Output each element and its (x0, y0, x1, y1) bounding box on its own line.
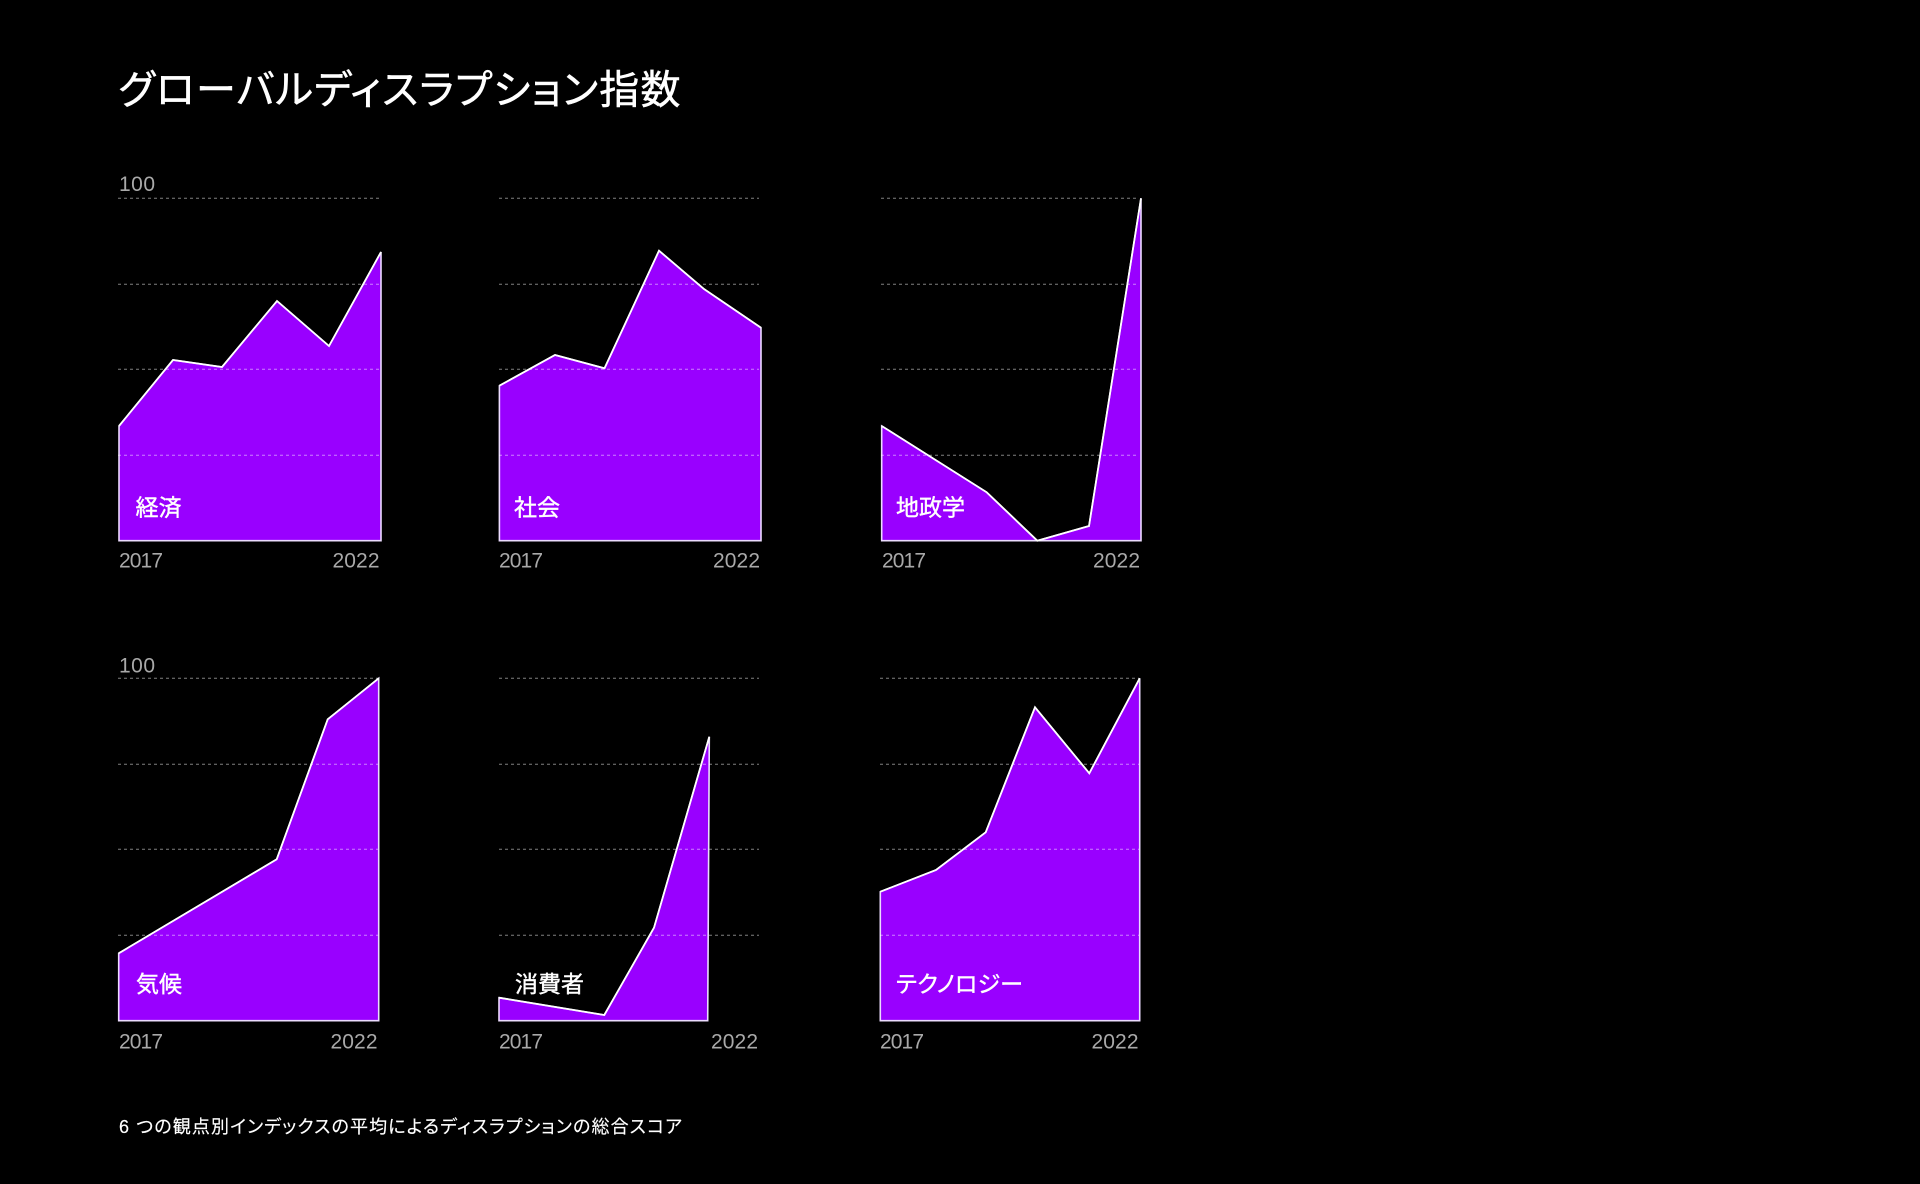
end year: 2022 (1092, 1030, 1138, 1054)
title: グローバルディスラプション指数 (118, 68, 680, 112)
start year: 2017 (880, 1030, 924, 1054)
chart label: 消費者 (515, 971, 584, 997)
end year: 2022 (713, 550, 760, 572)
end year: 2022 (332, 550, 380, 572)
chart: 消費者 (499, 678, 759, 1054)
chart: テクノロジー (880, 678, 1140, 1054)
footnote: 6 つの観点別インデックスの平均によるディスラプションの総合スコア (119, 1117, 682, 1137)
axis max label: 100 (119, 655, 155, 678)
end year: 2022 (330, 1030, 378, 1054)
start year: 2017 (882, 550, 926, 572)
chart: 地政学 (881, 198, 1141, 573)
chart label: 気候 (136, 971, 182, 997)
chart label: テクノロジー (896, 971, 1023, 997)
chart: 社会 (499, 198, 761, 573)
end year: 2022 (711, 1030, 758, 1054)
start year: 2017 (119, 1030, 163, 1054)
end year: 2022 (1093, 550, 1140, 572)
axis max label: 100 (119, 173, 155, 196)
chart: 経済 (118, 173, 381, 572)
chart label: 地政学 (896, 494, 965, 520)
start year: 2017 (499, 1030, 543, 1054)
chart label: 経済 (136, 494, 182, 520)
start year: 2017 (499, 550, 543, 572)
chart: 気候 (118, 655, 379, 1054)
chart label: 社会 (514, 494, 560, 520)
start year: 2017 (119, 550, 163, 572)
